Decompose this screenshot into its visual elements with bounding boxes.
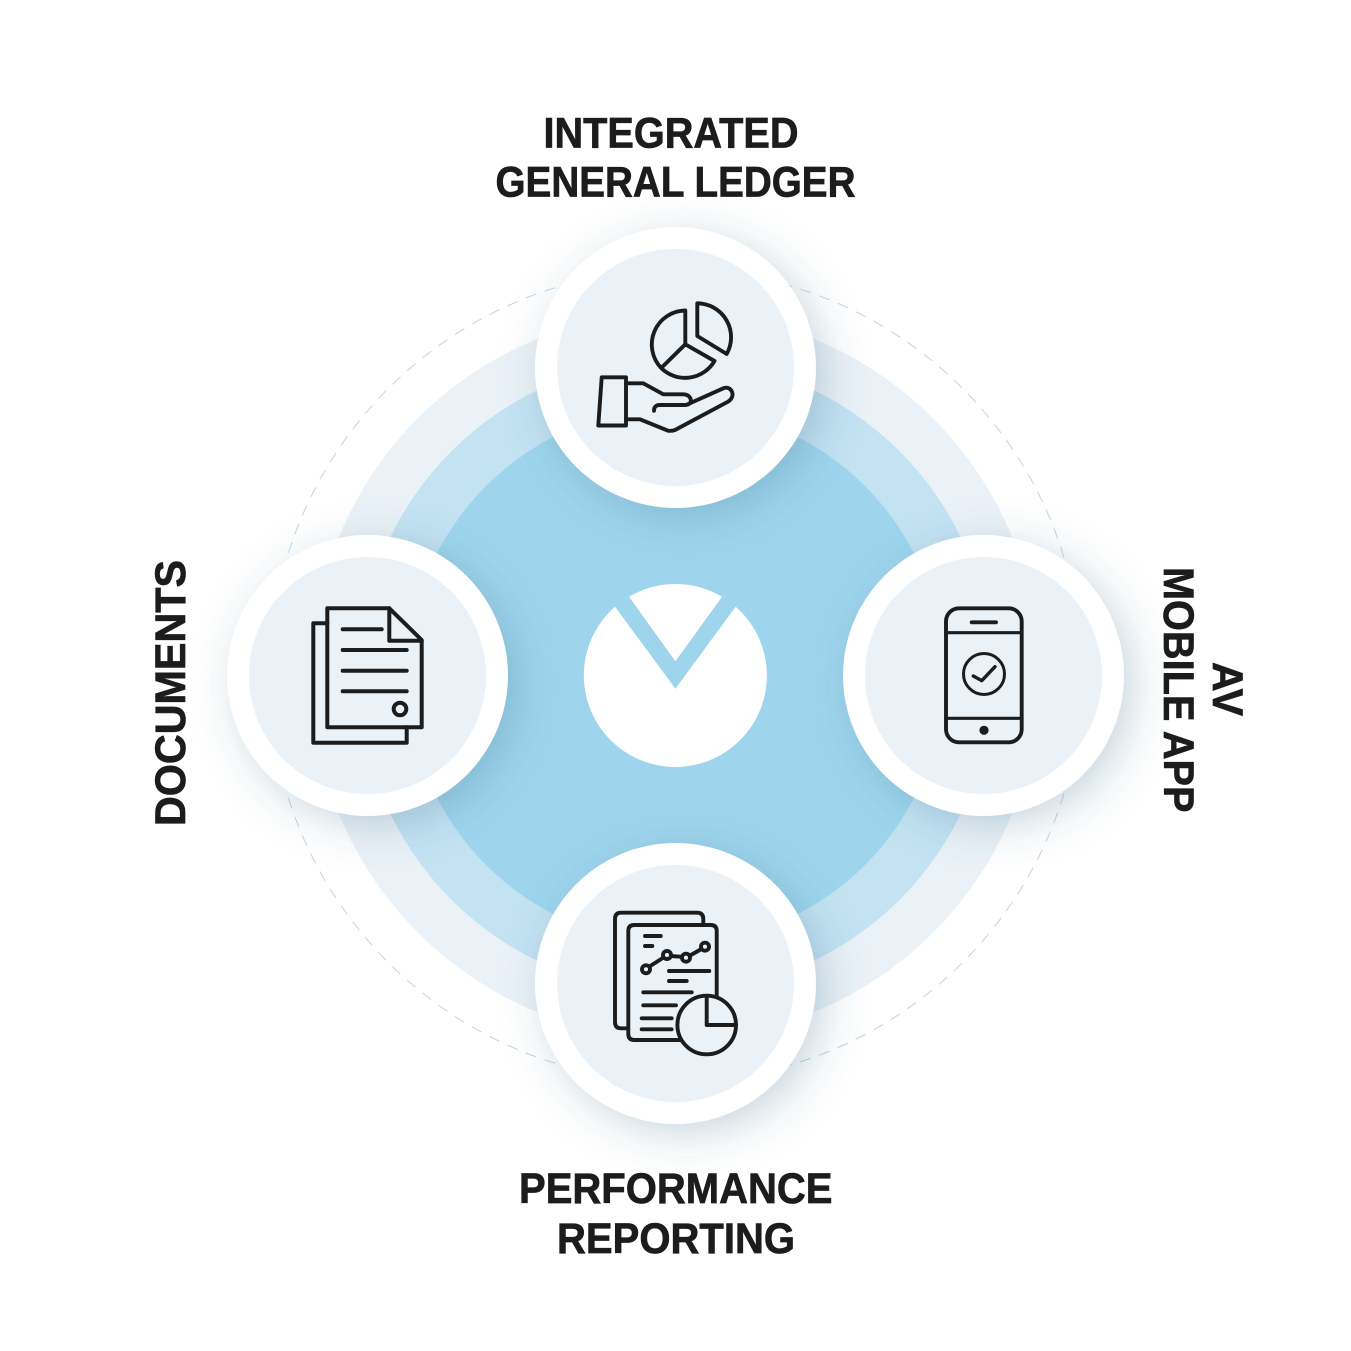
heading: integrated general ledger: INTEGRATED	[544, 110, 798, 158]
icon: report with chart and clock	[615, 913, 736, 1054]
node: performance reporting	[535, 843, 816, 1124]
icon: phone with check mark	[946, 608, 1022, 742]
heading: av mobile app	[1154, 567, 1251, 812]
node: documents	[227, 535, 508, 816]
heading: performance reporting	[519, 1165, 832, 1263]
background concentric rings	[270, 270, 1082, 1082]
heading: integrated general ledger: GENERAL LEDGER	[496, 158, 856, 206]
heading: av mobile app: MOBILE APP	[1154, 567, 1202, 812]
icon: hand holding pie chart	[598, 303, 733, 431]
node shadows	[238, 238, 1132, 1132]
heading: performance reporting: PERFORMANCE	[519, 1165, 832, 1213]
heading: performance reporting: REPORTING	[557, 1215, 795, 1263]
node: av mobile app	[843, 535, 1124, 816]
heading: documents: DOCUMENTS	[147, 560, 195, 826]
heading: integrated general ledger	[496, 110, 856, 206]
center logo	[584, 584, 767, 767]
icon: documents	[313, 608, 422, 743]
heading: av mobile app: AV	[1203, 662, 1251, 716]
node: integrated general ledger	[535, 227, 816, 508]
